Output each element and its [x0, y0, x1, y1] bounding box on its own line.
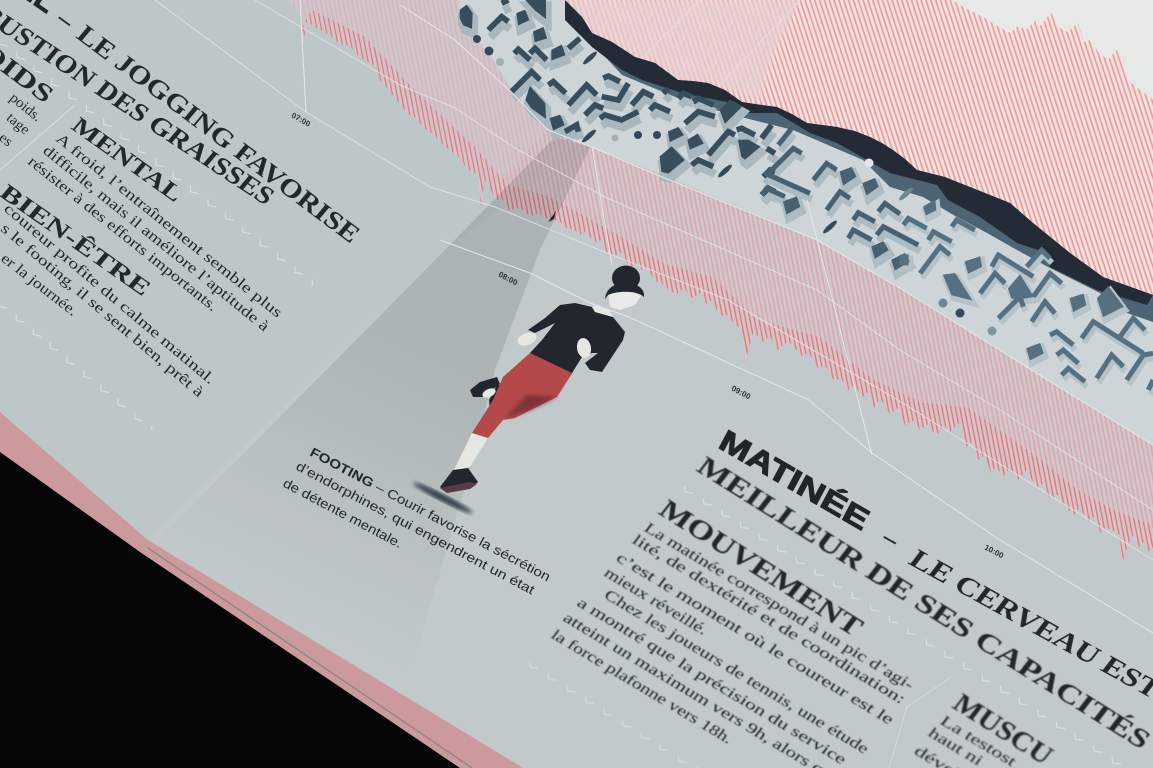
label 08:00: 08:00 — [497, 270, 519, 288]
right page tone — [148, 140, 1153, 768]
text block: muscu — [911, 688, 1059, 768]
body muscu: haut ni — [925, 725, 986, 768]
pale fold zone at upper left — [292, 0, 548, 191]
rear foot — [470, 377, 500, 397]
heading: réveil — [0, 0, 366, 249]
houses east — [900, 200, 1153, 390]
bars stripes — [293, 0, 1153, 560]
heading line one: LE JOGGING FAVORISE — [71, 19, 366, 249]
body mouvement: c’est le moment où le coureur est le — [613, 550, 897, 728]
page edge line — [148, 548, 472, 768]
body mouvement — [548, 520, 917, 768]
bars stripes — [565, 0, 1153, 295]
caption line one: FOOTING – Courir favorise la sécrétion — [308, 445, 553, 584]
hair bun — [612, 266, 640, 290]
heading: matinée — [691, 424, 1153, 755]
body bien-être — [0, 200, 218, 401]
zigzag row right bottom — [526, 660, 699, 768]
body mental: difficile, mais il améliore l’aptitude à — [39, 142, 273, 335]
white corner of page — [940, 0, 1153, 130]
trees — [473, 35, 996, 336]
body mental — [24, 130, 286, 335]
bars tint — [565, 0, 1153, 295]
subhead mouvement: MOUVEMENT — [653, 494, 869, 643]
ridge wash — [565, 0, 1153, 322]
houses centre — [762, 128, 918, 270]
fold wash on the bars — [565, 0, 800, 100]
time labels — [290, 111, 1005, 561]
body mouvement: La matinée correspond à un pic d’agi- — [641, 520, 917, 693]
body fragments: poids. — [6, 90, 45, 125]
bright bar tips along the jagged edge — [301, 30, 1153, 550]
body mouvement: la force plafonne vers 18h. — [548, 627, 736, 747]
label 10:00: 10:00 — [983, 543, 1005, 561]
body mouvement: Chez les joueurs de tennis, une étude — [601, 587, 872, 757]
faint grid — [640, 0, 800, 85]
body mental: A froid, l’entraînement semble plus — [52, 130, 286, 321]
black table surface — [0, 452, 460, 768]
body mouvement: atteint un maximum vers 9h, alors que — [560, 610, 844, 768]
text block: mental — [24, 113, 286, 335]
hands — [516, 330, 538, 348]
body mouvement: mieux réveillé. — [601, 565, 711, 638]
dark top — [528, 303, 625, 373]
caption line three: de détente mentale. — [281, 476, 405, 551]
red leggings — [472, 353, 573, 438]
text block: poids: tage — [3, 110, 33, 138]
body bien-être: s le footing, il se sent bien, prêt à — [0, 220, 207, 401]
town map — [458, 0, 1153, 445]
chart: lower striped pink bars — [290, 0, 1153, 562]
heading line one: LE CERVEAU EST — [903, 544, 1153, 705]
caption line two: d’endorphines, qui engendrent un état — [294, 459, 537, 597]
body bien-être: coureur profite du calme matinal. — [0, 200, 218, 388]
label 09:00: 09:00 — [730, 384, 752, 402]
heading dash: – — [50, 3, 82, 35]
text block: mouvement — [548, 494, 917, 768]
hair — [605, 283, 644, 299]
body mouvement: a montré que la précision du service — [574, 595, 850, 768]
label 07:00: 07:00 — [290, 111, 312, 129]
ground shadow — [412, 480, 474, 516]
text block: bien-être — [0, 179, 218, 401]
town ground — [458, 0, 1153, 445]
houses west — [460, 0, 775, 195]
zigzag row right top — [681, 485, 1141, 768]
subhead mental: MENTAL — [66, 113, 188, 207]
body muscu: La testost — [937, 713, 1021, 768]
icon: small bird — [548, 211, 556, 222]
subhead muscu: MUSCU — [947, 688, 1059, 768]
ridge dark core — [565, 0, 1153, 305]
neck — [592, 305, 613, 317]
text block: poids — [0, 24, 60, 150]
face — [608, 292, 643, 310]
heading line two: MEILLEUR DE SES CAPACITÉS — [691, 451, 1153, 755]
caption: footing — [281, 445, 553, 597]
title word: MATINÉE — [714, 424, 875, 537]
house shadows — [462, 5, 777, 202]
body mental: résister à des efforts importants. — [24, 153, 221, 315]
zigzag row upper left — [0, 37, 316, 287]
shoe — [440, 468, 478, 493]
chart: upper striped pink bars — [565, 0, 1153, 295]
body muscu — [911, 713, 1021, 768]
runner illustration — [412, 266, 644, 516]
cover edge in pink — [0, 412, 523, 768]
heading dash: – — [875, 523, 907, 554]
body mouvement: lité, de dextérité et de coordination: — [629, 532, 909, 707]
white sock leg — [453, 433, 488, 472]
shadow beam behind runner — [155, 137, 590, 690]
bars tint — [480, 130, 1153, 562]
zigzag row lower left — [0, 299, 154, 433]
